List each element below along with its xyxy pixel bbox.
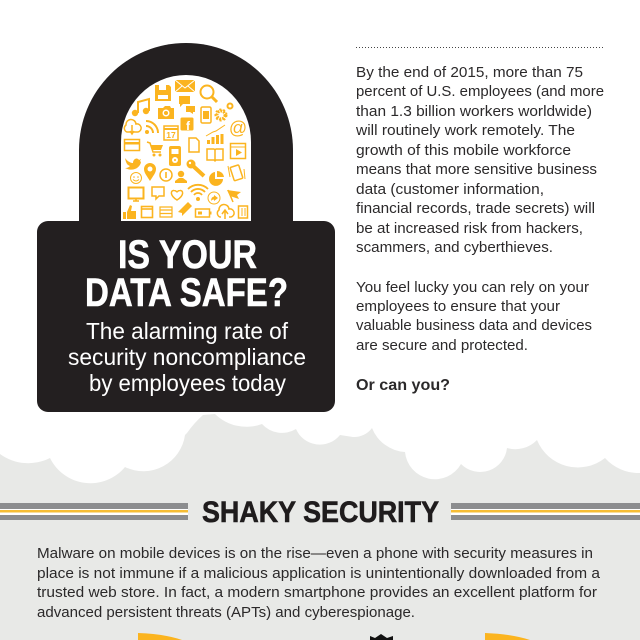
icon: thumbs up: [123, 205, 136, 219]
icon: camera: [158, 106, 174, 119]
intro paragraph: will routinely work remotely. The: [355, 123, 575, 139]
lock body: [37, 221, 335, 412]
left heading stripes: [0, 503, 188, 520]
icon: music note: [132, 99, 149, 116]
lock shackle: [79, 43, 293, 225]
icon: person: [175, 171, 187, 183]
icon: rss feed: [145, 121, 158, 134]
icon: shopping cart: [147, 142, 163, 156]
closing question: Or can you?: [356, 377, 450, 394]
intro paragraph: be at increased risk from hackers,: [356, 221, 583, 237]
padlock illustration: [37, 43, 335, 412]
icon: wifi: [188, 185, 208, 201]
icon: credit card: [124, 140, 140, 150]
icon: key: [186, 160, 204, 176]
cloud background: [0, 414, 640, 640]
left yellow graphic top: [138, 633, 182, 640]
icon: calendar: 17: [166, 130, 176, 140]
intro paragraph: growth of this mobile workforce: [356, 143, 571, 159]
icon: chat bubbles: [179, 96, 195, 114]
icon: speech bubble: [152, 187, 164, 199]
icon: tag: [178, 202, 192, 216]
icon: share: [208, 192, 220, 204]
second paragraph: valuable business data and devices: [356, 318, 592, 334]
shackle opening: [121, 75, 251, 221]
subtitle: [68, 318, 306, 396]
subtitle: The alarming rate of: [86, 318, 288, 344]
title: DATA SAFE?: [85, 271, 288, 315]
subtitle: security noncompliance: [68, 344, 306, 370]
section heading: SHAKY SECURITY: [202, 496, 439, 529]
icon: battery: [196, 209, 212, 217]
icon: phone battery: [201, 107, 211, 123]
icon: heart: [171, 190, 183, 200]
icon: growth chart: [206, 125, 225, 144]
icon: smiley: [130, 172, 142, 184]
icon: flag: [227, 190, 241, 202]
icon: gears: [216, 104, 232, 120]
icon: at sign: @: [229, 118, 247, 138]
section paragraph: place is not immune if a malicious application is unintentionally downloaded from a: [37, 566, 601, 582]
icon: window: [142, 206, 152, 218]
right heading stripes: [451, 503, 640, 520]
right yellow graphic top: [485, 633, 530, 640]
icon: database: [160, 207, 172, 217]
second paragraph: employees to ensure that your: [356, 299, 560, 315]
icon cluster: [123, 80, 248, 219]
intro paragraph: By the end of 2015, more than 75: [356, 65, 583, 81]
icon: cloud upload: [217, 204, 234, 219]
black crown graphic top: [370, 634, 393, 640]
section paragraph: [37, 546, 601, 621]
intro paragraph: financial records, trade secrets) will: [356, 201, 595, 217]
icon: vibrating phone: [228, 165, 245, 181]
subtitle: by employees today: [89, 370, 286, 396]
intro paragraph: means that more sensitive business: [356, 162, 597, 178]
icon: floppy disk: [155, 85, 171, 101]
icon: bird: [125, 158, 141, 170]
second paragraph: [356, 280, 592, 354]
dotted rule: [356, 46, 604, 48]
section paragraph: Malware on mobile devices is on the rise—even a phone with security measures in: [37, 546, 593, 562]
icon: documents: [238, 206, 248, 218]
intro paragraph: than 1.3 billion workers worldwide): [356, 104, 592, 120]
section paragraph: trusted web store. In fact, a modern smartphone provides an excellent platform for: [37, 585, 597, 601]
title: IS YOUR: [118, 233, 257, 277]
intro paragraph: percent of U.S. employees (and more: [356, 84, 604, 100]
icon: info: [160, 169, 172, 181]
icon: media player: [169, 146, 181, 166]
icon: monitor: [128, 188, 144, 201]
icon: envelope: [175, 80, 195, 92]
icon: map pin: [144, 163, 156, 181]
icon: video player: [230, 144, 246, 158]
title: [85, 233, 288, 315]
intro paragraph: scammers, and cyberthieves.: [356, 240, 553, 256]
icon: social f: f: [186, 119, 191, 133]
icon: open book: [207, 149, 223, 161]
icon: pie chart: [209, 171, 224, 186]
section paragraph: advanced persistent threats (APTs) and cyberespionage.: [37, 605, 415, 621]
intro paragraph: data (customer information,: [356, 182, 544, 198]
second paragraph: You feel lucky you can rely on your: [356, 280, 589, 296]
icon: magnifier: [200, 86, 217, 102]
intro paragraph: [355, 65, 604, 256]
icon: document: [189, 138, 199, 152]
icon: cloud download: [124, 119, 141, 134]
second paragraph: are secure and protected.: [356, 338, 528, 354]
